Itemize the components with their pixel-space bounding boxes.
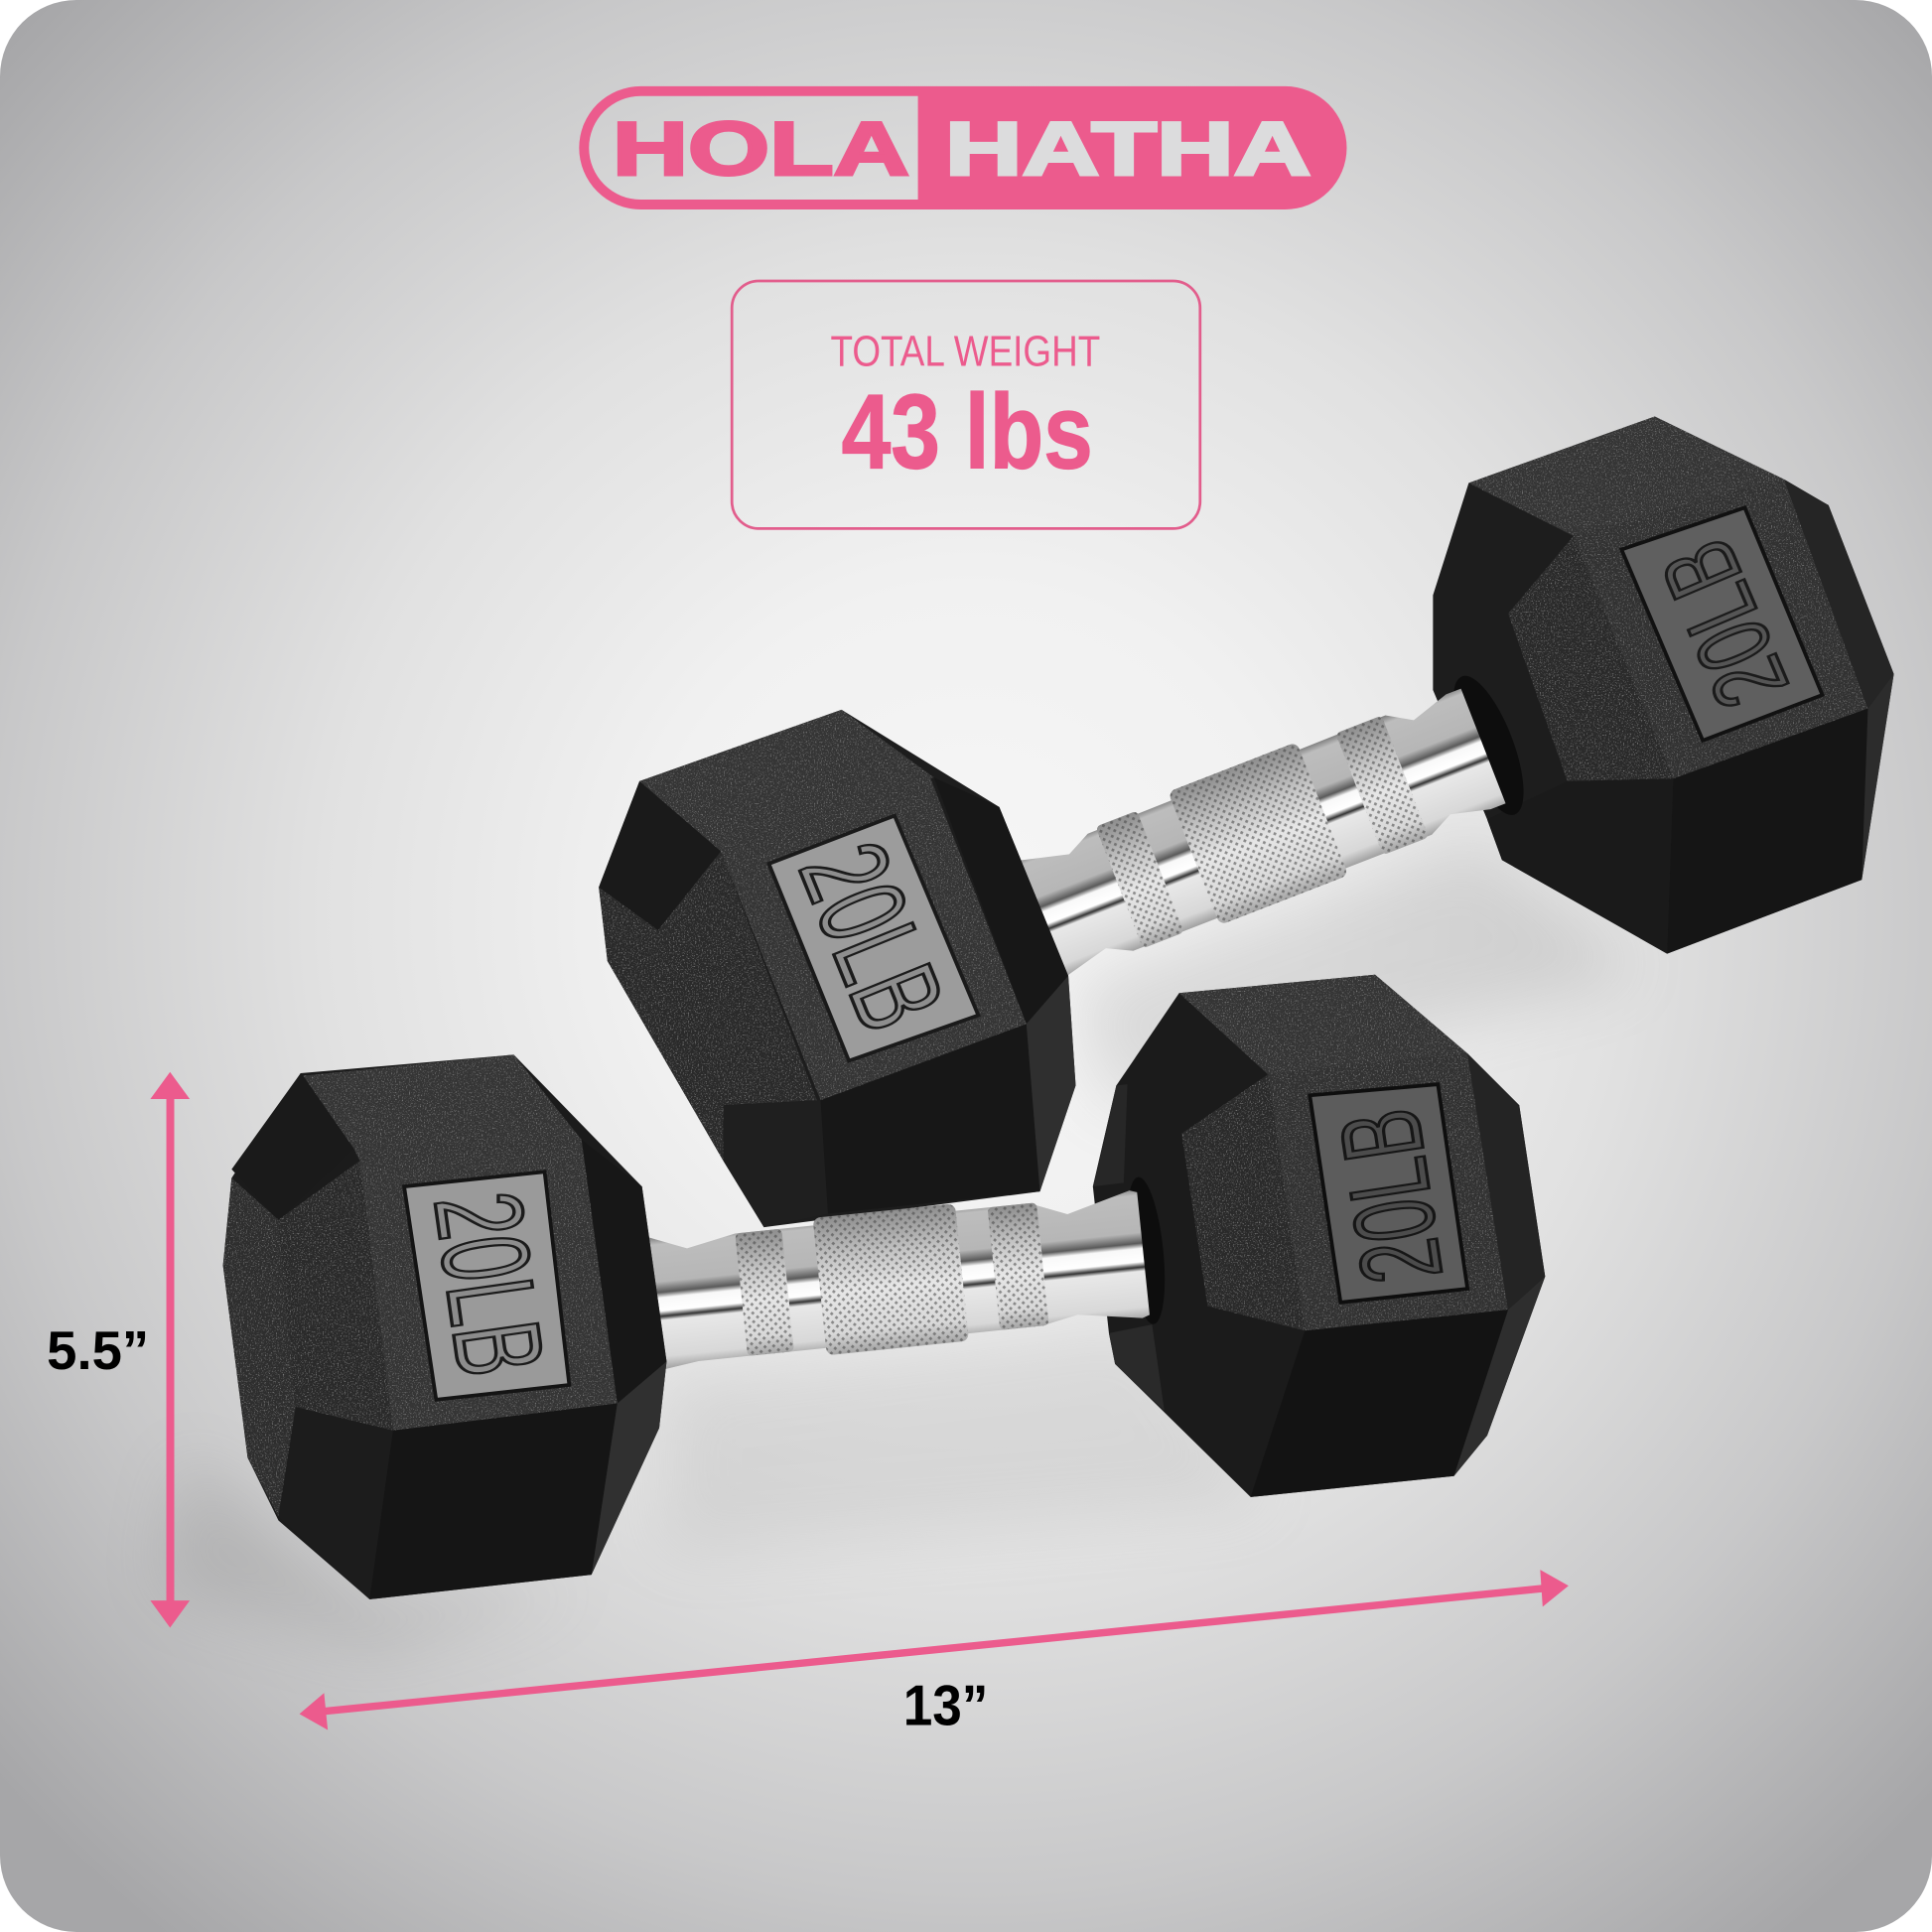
back dumbbell handle xyxy=(1016,679,1509,985)
back dumbbell left head xyxy=(599,710,1075,1227)
label: height 5.5 in: 5.5” xyxy=(47,1320,149,1381)
dumbbell: front xyxy=(223,975,1545,1599)
front dumbbell left head xyxy=(223,1054,666,1599)
front dumbbell left head: 20LB xyxy=(408,1184,569,1384)
front dumbbell right head xyxy=(1093,975,1545,1497)
back dumbbell left head: 20LB xyxy=(773,825,970,1048)
logo: HolaHatha: HATHA xyxy=(945,107,1311,192)
front dumbbell right head: 20LB xyxy=(1316,1101,1466,1291)
label: length 13 in: 13” xyxy=(903,1675,988,1738)
arrow: height xyxy=(150,1072,190,1627)
logo: HolaHatha xyxy=(579,86,1346,209)
callout: total weight: 43 lbs xyxy=(842,372,1093,491)
logo: HolaHatha: HOLA xyxy=(613,107,909,192)
back dumbbell right head: 20LB xyxy=(1639,524,1811,723)
arrow: length xyxy=(300,1570,1569,1729)
front dumbbell handle xyxy=(648,1184,1151,1372)
dumbbell: back xyxy=(599,416,1894,1227)
callout: total weight xyxy=(732,281,1200,528)
callout: total weight: TOTAL WEIGHT xyxy=(830,329,1100,376)
back dumbbell right head xyxy=(1433,416,1894,954)
floor shadows xyxy=(160,838,1639,1651)
